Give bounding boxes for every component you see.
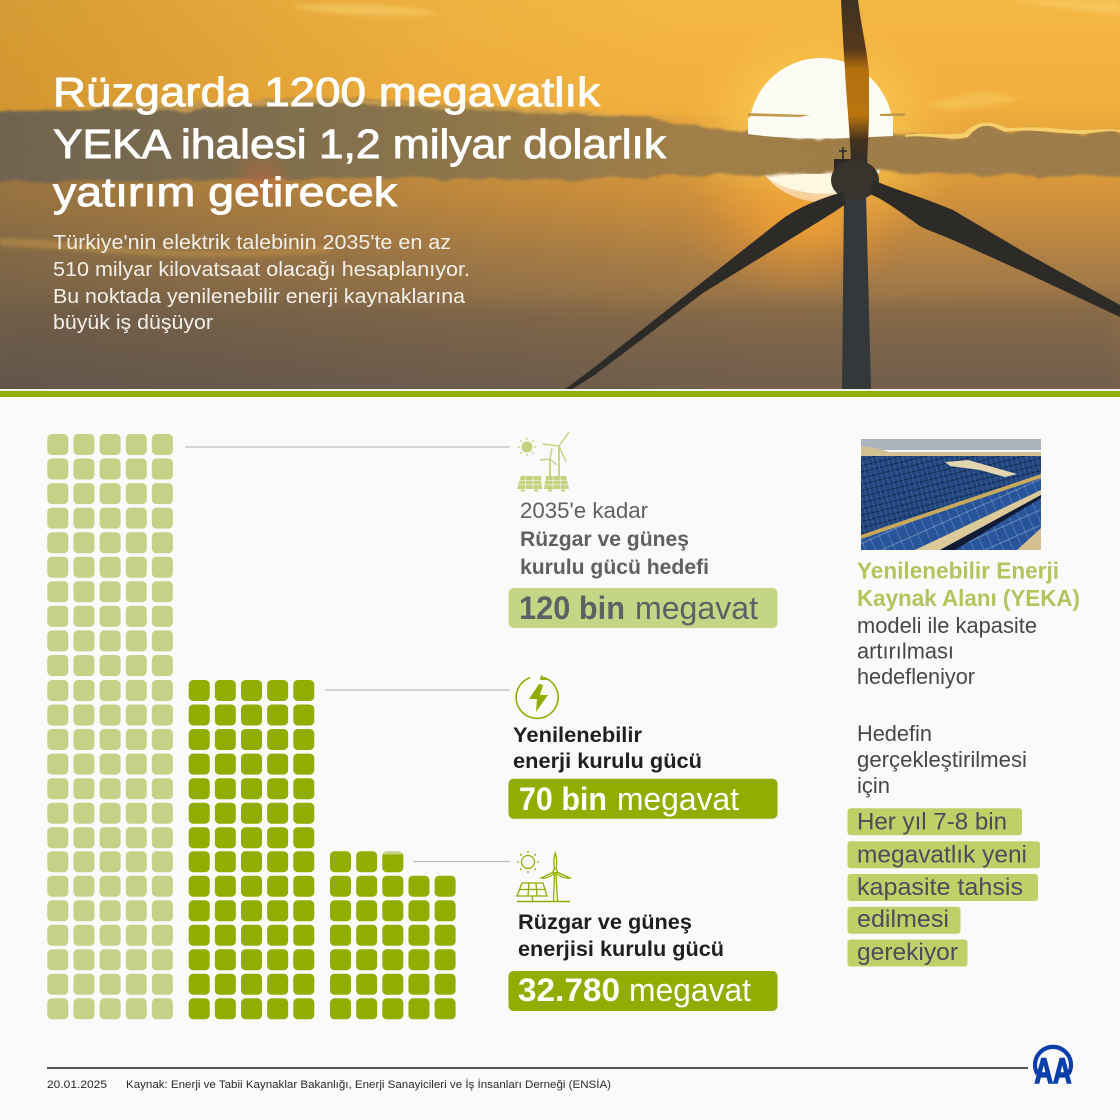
text: target label: 2035'e kadar — [520, 498, 648, 523]
leader lines — [185, 447, 510, 862]
intro text: büyük iş düşüyor — [53, 312, 213, 334]
title: yatırım getirecek — [53, 169, 398, 215]
value pill: 70 bin megavat: 70 bin — [519, 781, 607, 817]
highlighted callout: yearly allocation: gerekiyor — [857, 939, 958, 966]
text: YEKA description — [857, 613, 1037, 689]
icon: renewable energy bolt — [516, 675, 558, 718]
title — [53, 69, 667, 215]
value pill: 32.780 megavat: megavat — [629, 972, 751, 1008]
text: goal intro — [857, 721, 1027, 798]
text: goal intro: Hedefin — [857, 721, 932, 746]
text: YEKA description: artırılması — [857, 638, 954, 664]
text: YEKA description: hedefleniyor — [857, 664, 975, 689]
footer date and source: Kaynak: Enerji ve Tabii Kaynaklar Bakanlığı, Enerji Sanayicileri ve İş İnsanları Derneği (ENSİA) — [126, 1078, 611, 1091]
text: wind and solar label — [518, 911, 724, 961]
value pill: 120 bin megavat — [508, 588, 778, 628]
value pill: 32.780 megavat — [508, 971, 778, 1011]
footer date and source: 20.01.2025 — [47, 1079, 107, 1091]
waffle column: 120 bin target — [47, 434, 173, 1019]
hero photo: wind turbine at sunset — [0, 0, 1120, 390]
text: wind and solar label: enerjisi kurulu gücü — [518, 938, 724, 961]
icon: sun, turbine and panel — [517, 851, 570, 902]
waffle column: 70 bin installed renewable — [189, 680, 314, 1019]
value pill: 120 bin megavat: megavat — [635, 590, 758, 626]
intro text — [53, 232, 470, 334]
waffle column: 32.780 wind and solar — [330, 851, 456, 1019]
value pill: 32.780 megavat: 32.780 — [518, 972, 620, 1008]
intro text: Bu noktada yenilenebilir enerji kaynaklarına — [53, 286, 466, 308]
highlighted callout: yearly allocation: kapasite tahsis — [857, 874, 1023, 901]
intro text: 510 milyar kilovatsaat olacağı hesaplanıyor. — [53, 259, 470, 281]
footer rule — [47, 1067, 1028, 1069]
icon: AA logo: AA — [1034, 1052, 1072, 1091]
text: YEKA heading: Kaynak Alanı (YEKA) — [857, 585, 1080, 611]
text: target label — [520, 498, 709, 579]
text: target label: kurulu gücü hedefi — [520, 556, 709, 579]
text: target label: Rüzgar ve güneş — [520, 528, 689, 551]
intro text: Türkiye'nin elektrik talebinin 2035'te en az — [53, 232, 451, 254]
text: YEKA heading: Yenilenebilir Enerji — [857, 558, 1059, 584]
icon: sun, wind turbines and solar panels — [517, 432, 569, 490]
text: YEKA description: modeli ile kapasite — [857, 613, 1037, 638]
text: renewable label: enerji kurulu gücü — [513, 750, 702, 773]
title: Rüzgarda 1200 megavatlık — [53, 69, 601, 115]
icon: AA logo — [1034, 1047, 1072, 1091]
text: goal intro: gerçekleştirilmesi — [857, 747, 1027, 772]
photo: solar panel field — [861, 439, 1041, 550]
value pill: 70 bin megavat: megavat — [617, 781, 739, 817]
text: renewable label: Yenilenebilir — [513, 724, 642, 747]
highlighted callout: yearly allocation: edilmesi — [857, 906, 949, 933]
highlighted callout: yearly allocation — [848, 808, 1040, 966]
text: wind and solar label: Rüzgar ve güneş — [518, 911, 692, 934]
text: goal intro: için — [857, 773, 890, 798]
value pill: 70 bin megavat — [508, 779, 778, 819]
value pill: 120 bin megavat: 120 bin — [519, 590, 625, 626]
highlighted callout: yearly allocation: megavatlık yeni — [857, 842, 1027, 868]
text: YEKA heading — [857, 558, 1080, 611]
hero divider — [0, 389, 1120, 397]
text: renewable label — [513, 724, 702, 773]
highlighted callout: yearly allocation: Her yıl 7-8 bin — [857, 808, 1007, 836]
title: YEKA ihalesi 1,2 milyar dolarlık — [53, 121, 667, 167]
